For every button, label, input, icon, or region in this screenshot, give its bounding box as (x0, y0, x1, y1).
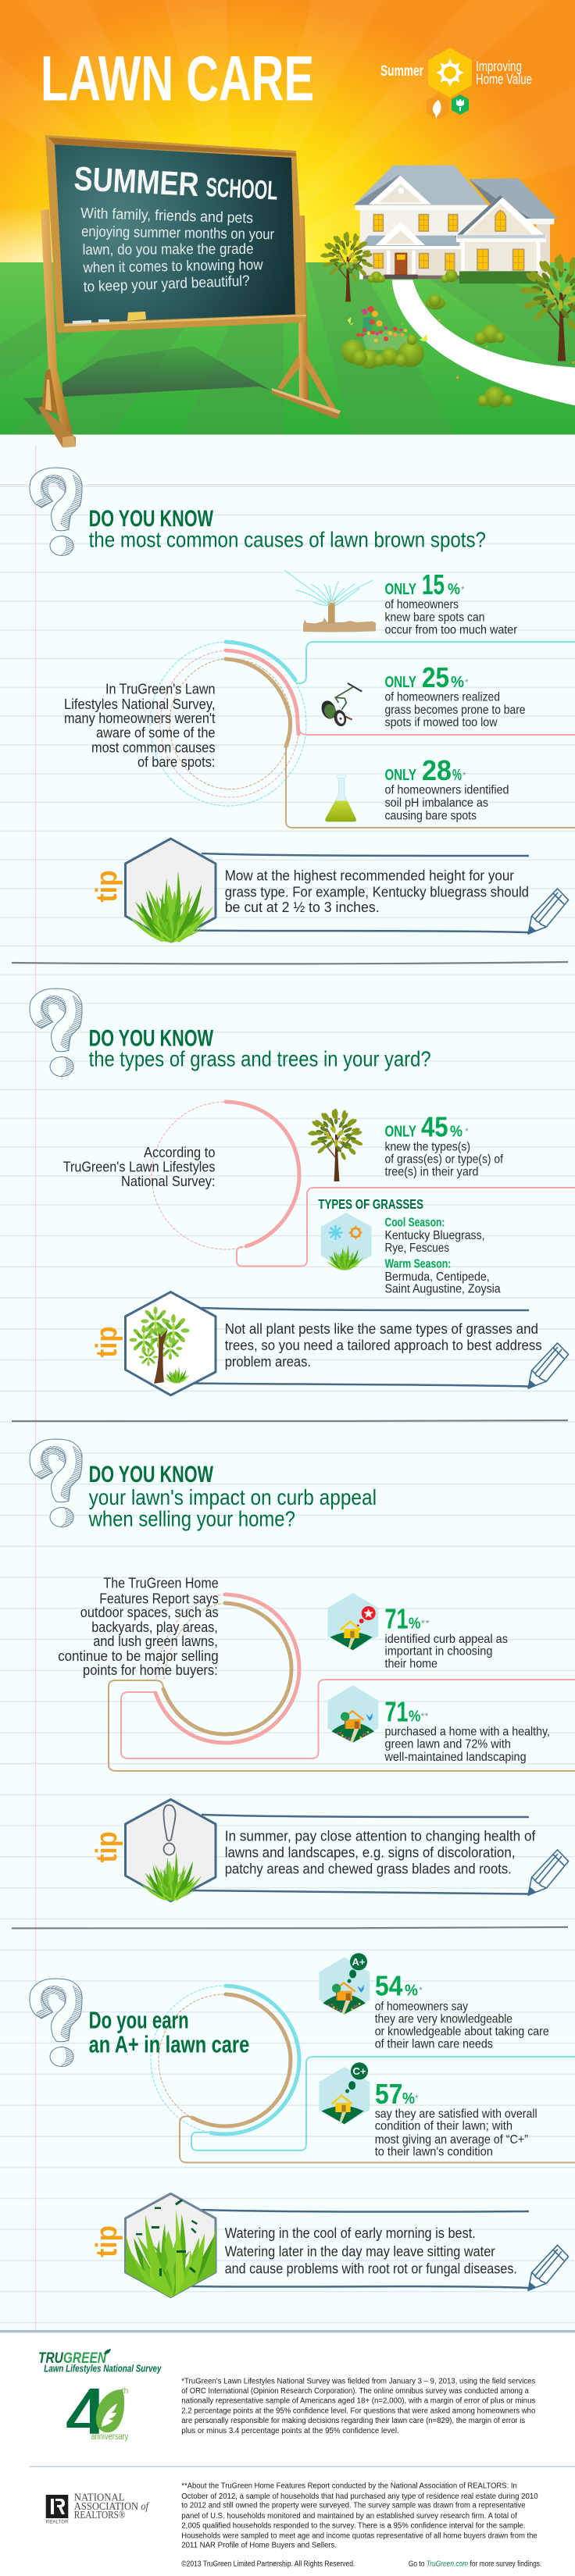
stat: 71 percent curb appeal: % (409, 1616, 421, 1633)
types of grasses: Cool Season: (384, 1217, 445, 1230)
home features footnote: **About the TruGreen Home Features Report conducted by the National Association of REALTORS: In (181, 2482, 517, 2491)
survey footnote: are personally responsible for making decisions regarding their lawn care (n=829), the margin of error is (181, 2417, 525, 2425)
tip label: tip (91, 1327, 123, 1358)
stat: 25 percent (384, 661, 526, 729)
tip text: Watering later in the day may leave sitting water (225, 2243, 495, 2259)
tulip hexagon (452, 94, 469, 115)
stat: 71 percent healthy lawn: purchased a home with a healthy, (384, 1726, 550, 1738)
season logo (380, 48, 532, 119)
intro text: of bare spots: (138, 754, 216, 770)
board text: to keep your yard beautiful? (83, 273, 250, 295)
icon: pencil (528, 889, 569, 934)
stat: 71 percent healthy lawn (384, 1696, 550, 1764)
question mark icon (30, 468, 82, 556)
tip text (225, 868, 529, 915)
stat: 28 percent: 28 (422, 754, 452, 786)
ring chart with connectors (109, 1594, 575, 1771)
stat: 57 percent: 57 (375, 2078, 402, 2110)
stat: 15 percent: % (448, 581, 460, 598)
title: LAWN CARE (41, 44, 314, 114)
survey footnote: nationally representative sample of Americans aged 18+ (n=2,000), with a margin of error of plus or minus (181, 2397, 535, 2406)
season logo: Home Value (476, 72, 532, 87)
stat: 54 percent: or knowledgeable about taking care (375, 2026, 549, 2039)
tip text: Watering in the cool of early morning is best. (225, 2225, 476, 2241)
heading: Do you earn (89, 2006, 189, 2033)
icon: sprinkler (284, 570, 376, 632)
types of grasses: Bermuda, Centipede, (384, 1270, 490, 1284)
stat: 54 percent: they are very knowledgeable (375, 2013, 512, 2026)
heading: the most common causes of lawn brown spots? (89, 528, 486, 551)
blackboard foot (38, 406, 76, 447)
blackboard on wooden stand (41, 135, 341, 436)
ring chart with connectors (150, 642, 575, 828)
intro text: Features Report says (99, 1591, 219, 1606)
icon: tree (302, 1099, 371, 1181)
stat: 54 percent: 54 (375, 1970, 402, 2002)
stat: 45 percent: ONLY (384, 1124, 416, 1141)
icon: exclamation grass hexagon (125, 1799, 216, 1901)
TruGreen logo: TRUGREEN (38, 2350, 107, 2367)
stat: 28 percent: ONLY (384, 767, 416, 784)
tip text (225, 1829, 536, 1876)
40th anniversary logo (66, 2387, 128, 2442)
stat: 45 percent: tree(s) in their yard (384, 1166, 478, 1179)
season logo: Summer (380, 63, 423, 80)
icon: grass hexagon (125, 839, 216, 943)
stat: 15 percent: of homeowners (384, 598, 459, 611)
tip text: problem areas. (225, 1354, 311, 1370)
tip: watering (91, 2193, 569, 2300)
icon: pencil (528, 2245, 569, 2290)
tip text: lawns and landscapes, e.g. signs of discoloration, (225, 1844, 516, 1860)
home features footnote: 2,005 qualified households responded to the survey. There is a 95% confidence interval for the sample. (181, 2522, 526, 2531)
heading (89, 2006, 249, 2058)
TruGreen logo (38, 2349, 162, 2375)
panel: curb appeal (30, 1439, 575, 1901)
panel: A+ in lawn care (30, 1953, 575, 2300)
intro text: In TruGreen's Lawn (105, 681, 216, 697)
stat: 45 percent: of grass(es) or type(s) of (384, 1153, 503, 1167)
stat: 25 percent: spots if mowed too low (384, 716, 498, 729)
left lawn tree (315, 223, 380, 301)
stat: 15 percent: * (461, 584, 465, 595)
heading: the types of grass and trees in your yard? (89, 1047, 431, 1071)
heading (89, 1025, 431, 1071)
intro text: and lush green lawns, (93, 1634, 218, 1649)
tip text: Not all plant pests like the same types of grasses and (225, 1321, 538, 1337)
intro text: Lifestyles National Survey, (64, 697, 216, 712)
heading: DO YOU KNOW (89, 506, 213, 532)
home features footnote: 2011 NAR Profile of Home Buyers and Sellers. (181, 2542, 337, 2550)
stat: 71 percent curb appeal: important in choosing (384, 1645, 492, 1659)
tip text: patchy areas and chewed grass blades and roots. (225, 1861, 512, 1876)
survey footnote: plus or minus 3.4 percentage points at the 95% confidence level. (181, 2427, 399, 2435)
tip text: trees, so you need a tailored approach to best address (225, 1338, 542, 1353)
stat: 71 percent healthy lawn: well-maintained landscaping (384, 1751, 527, 1764)
board text (80, 205, 275, 295)
intro text: many homeowners weren't (64, 711, 216, 726)
board text: enjoying summer months on your (81, 224, 275, 243)
types of grasses: Kentucky Bluegrass, (384, 1229, 484, 1242)
heading (89, 506, 486, 551)
tip text: grass type. For example, Kentucky bluegrass should (225, 884, 529, 900)
types of grasses: TYPES OF GRASSES (318, 1196, 423, 1212)
stat: 57 percent: say they are satisfied with overall (375, 2107, 538, 2121)
intro text: continue to be major selling (58, 1648, 219, 1664)
notebook paper background (0, 434, 575, 2330)
National Association of Realtors logo: ASSOCIATION of (74, 2500, 150, 2512)
icon: pencil (528, 1850, 569, 1895)
stat: 54 percent: * (419, 1985, 423, 1996)
stat: 28 percent (384, 754, 509, 823)
right lawn tree (512, 241, 575, 361)
board text: when it comes to knowing how (82, 257, 263, 276)
intro text: most common causes (91, 740, 216, 756)
stat: 57 percent: % (402, 2090, 415, 2107)
home features footnote: to 2012 and still owned the property were surveyed. The survey sample was drawn from a representative (181, 2502, 526, 2510)
stat: 57 percent: most giving an average of “C+” (375, 2133, 528, 2147)
website call to action: Go to TruGreen.com for more survey findings. (409, 2560, 541, 2569)
rear stand legs (41, 209, 309, 436)
stat: 25 percent: * (465, 677, 469, 688)
survey footnote: of ORC International (Opinion Research Corporation). The online omnibus survey was conducted among a (181, 2387, 529, 2396)
stat: 45 percent: % (450, 1124, 462, 1141)
icon: tree hexagon (125, 1292, 216, 1395)
question mark icon (30, 1979, 82, 2066)
stat: 71 percent curb appeal (384, 1603, 508, 1671)
stat: 54 percent: of homeowners say (375, 2000, 468, 2013)
icon: C+ house (319, 2062, 370, 2124)
stat: 25 percent: 25 (422, 661, 449, 693)
TruGreen logo: Lawn Lifestyles National Survey (44, 2364, 162, 2375)
stat: 71 percent healthy lawn: ** (420, 1711, 429, 1722)
heading (88, 1462, 377, 1530)
intro text: TruGreen's Lawn Lifestyles (63, 1159, 216, 1174)
stat: 25 percent: of homeowners realized (384, 690, 500, 704)
icon: grass with ants hexagon (124, 2193, 217, 2299)
icon: house with star thought (327, 1593, 378, 1650)
board text: With family, friends and pets (80, 205, 253, 227)
stat: 57 percent: to their lawn's condition (375, 2146, 493, 2159)
tip: watch lawn health (91, 1799, 569, 1901)
tip text: and cause problems with root rot or fungal diseases. (225, 2261, 517, 2277)
National Association of Realtors logo: REALTORS® (74, 2509, 125, 2521)
stat: 54 percent: of their lawn care needs (375, 2038, 493, 2051)
heading: DO YOU KNOW (89, 1462, 213, 1488)
icon: flask (325, 775, 356, 821)
tip text (225, 1321, 542, 1370)
season logo: Improving (476, 59, 522, 74)
stat: 57 percent: condition of their lawn; with (375, 2120, 512, 2133)
board heading: SUMMER (73, 160, 200, 204)
stat: 28 percent: * (462, 770, 466, 781)
intro text (64, 681, 216, 770)
stat: 28 percent: causing bare spots (384, 809, 477, 823)
question mark icon (30, 1439, 82, 1527)
house (354, 166, 558, 283)
heading: an A+ in lawn care (89, 2030, 249, 2058)
heading: when selling your home? (88, 1506, 295, 1530)
stat: 25 percent: grass becomes prone to bare (384, 704, 526, 717)
stat: 54 percent (375, 1970, 549, 2051)
icon: season hexagon (321, 1213, 372, 1270)
stat: 45 percent: 45 (421, 1111, 448, 1143)
tip: mowing height (91, 839, 569, 943)
board heading: SCHOOL (205, 173, 278, 206)
tip text: Mow at the highest recommended height for your (225, 868, 514, 884)
icon: landscaped house (327, 1685, 378, 1743)
stat: 57 percent (375, 2078, 538, 2159)
types of grasses: Saint Augustine, Zoysia (384, 1283, 501, 1296)
stat: 45 percent (384, 1111, 503, 1179)
header scene (0, 0, 575, 436)
leaf hexagon (427, 94, 449, 119)
stat: 28 percent: of homeowners identified (384, 784, 509, 797)
stat: 71 percent healthy lawn: 71 (384, 1696, 408, 1728)
stat: 71 percent healthy lawn: green lawn and 72% with (384, 1737, 511, 1751)
tip label: tip (91, 2225, 123, 2257)
frame and chalkboard surface (45, 135, 305, 333)
intro text: outdoor spaces, such as (80, 1605, 219, 1620)
tip label: tip (91, 870, 123, 903)
stat: 15 percent: occur from too much water (384, 623, 518, 637)
stat: 71 percent curb appeal: identified curb appeal as (384, 1633, 508, 1646)
types of grasses: Rye, Fescues (384, 1242, 449, 1255)
heading: your lawn's impact on curb appeal (89, 1485, 377, 1509)
panel: brown spots (30, 468, 575, 943)
intro text: According to (144, 1145, 216, 1160)
National Association of Realtors logo: REALTOR (46, 2521, 69, 2525)
intro text: backyards, play areas, (91, 1619, 218, 1635)
types of grasses: Warm Season: (384, 1258, 451, 1271)
stat: 15 percent: knew bare spots can (384, 611, 484, 625)
types of grasses (318, 1196, 501, 1296)
heading: DO YOU KNOW (89, 1025, 213, 1051)
stat: 15 percent: ONLY (384, 581, 416, 598)
home features footnote: October of 2012, a sample of households that had purchased any type of residence real estate during 2010 (181, 2492, 538, 2501)
striped lawn (0, 262, 575, 434)
tip label: tip (91, 1831, 123, 1862)
survey footnote: 2.2 percentage points at the 95% confidence level. For questions that were asked among homeowners who (181, 2407, 536, 2416)
shrubs and tulips (341, 287, 574, 408)
National Association of Realtors logo: NATIONAL (74, 2492, 125, 2503)
footer (0, 2330, 575, 2576)
sun hexagon (428, 48, 472, 98)
stat: 15 percent: 15 (422, 568, 445, 600)
ring chart with connectors (151, 1986, 575, 2163)
icon: A+ house: A+ (352, 1956, 366, 1968)
driveway (392, 280, 575, 405)
chalk and eraser (73, 312, 146, 324)
home features footnote: Households were sampled to meet age and income quotas representative of all home buyers drawn from the (181, 2532, 538, 2541)
stat: 57 percent: * (415, 2093, 419, 2104)
sunburst sky (0, 0, 575, 265)
stat: 45 percent: * (465, 1126, 469, 1137)
survey footnote (181, 2378, 536, 2435)
ring chart with connector (152, 1102, 575, 1267)
stat: 28 percent: % (452, 767, 462, 784)
home features footnote: panel of U.S. households monitored and maintained by an established survey research firm. A total of (181, 2512, 517, 2521)
icon: C+ house: C+ (353, 2065, 366, 2077)
stat: 71 percent curb appeal: 71 (384, 1603, 408, 1635)
intro text (63, 1145, 216, 1189)
stat: 54 percent: % (405, 1983, 418, 2000)
intro text: points for home buyers: (83, 1662, 218, 1678)
question mark icon (30, 989, 82, 1076)
intro text: National Survey: (121, 1174, 216, 1189)
copyright line: ©2013 TruGreen Limited Partnership. All Rights Reserved. (181, 2560, 355, 2569)
stat: 25 percent: % (451, 674, 464, 691)
stat: 25 percent: ONLY (384, 674, 416, 691)
home features footnote (181, 2482, 538, 2550)
blackboard shadow (62, 346, 271, 397)
stat: 28 percent: soil pH imbalance as (384, 796, 488, 810)
intro text (58, 1576, 219, 1678)
tip text: In summer, pay close attention to changing health of (225, 1829, 536, 1844)
intro text: The TruGreen Home (103, 1576, 219, 1591)
panel: grass and trees (30, 989, 575, 1395)
stat: 71 percent curb appeal: ** (420, 1618, 430, 1629)
icon: push mower (319, 683, 362, 728)
tip text (225, 2225, 517, 2277)
tip text: be cut at 2 ½ to 3 inches. (225, 900, 380, 915)
stat: 71 percent curb appeal: their home (384, 1657, 438, 1671)
National Association of Realtors logo (46, 2492, 150, 2525)
icon: pencil (528, 1343, 569, 1388)
stat: 45 percent: knew the types(s) (384, 1141, 470, 1154)
intro text: aware of some of the (96, 725, 216, 740)
stat: 71 percent healthy lawn: % (409, 1708, 421, 1726)
40th anniversary logo: anniversary (91, 2432, 128, 2442)
tip: plant pests (91, 1292, 569, 1395)
stat: 15 percent (384, 568, 518, 637)
board text: lawn, do you make the grade (83, 241, 254, 258)
survey footnote: *TruGreen's Lawn Lifestyles National Survey was fielded from January 3 – 9, 2013, using the field services (181, 2378, 535, 2386)
40th anniversary logo: th (122, 2387, 128, 2396)
icon: A+ house (319, 1953, 370, 2015)
